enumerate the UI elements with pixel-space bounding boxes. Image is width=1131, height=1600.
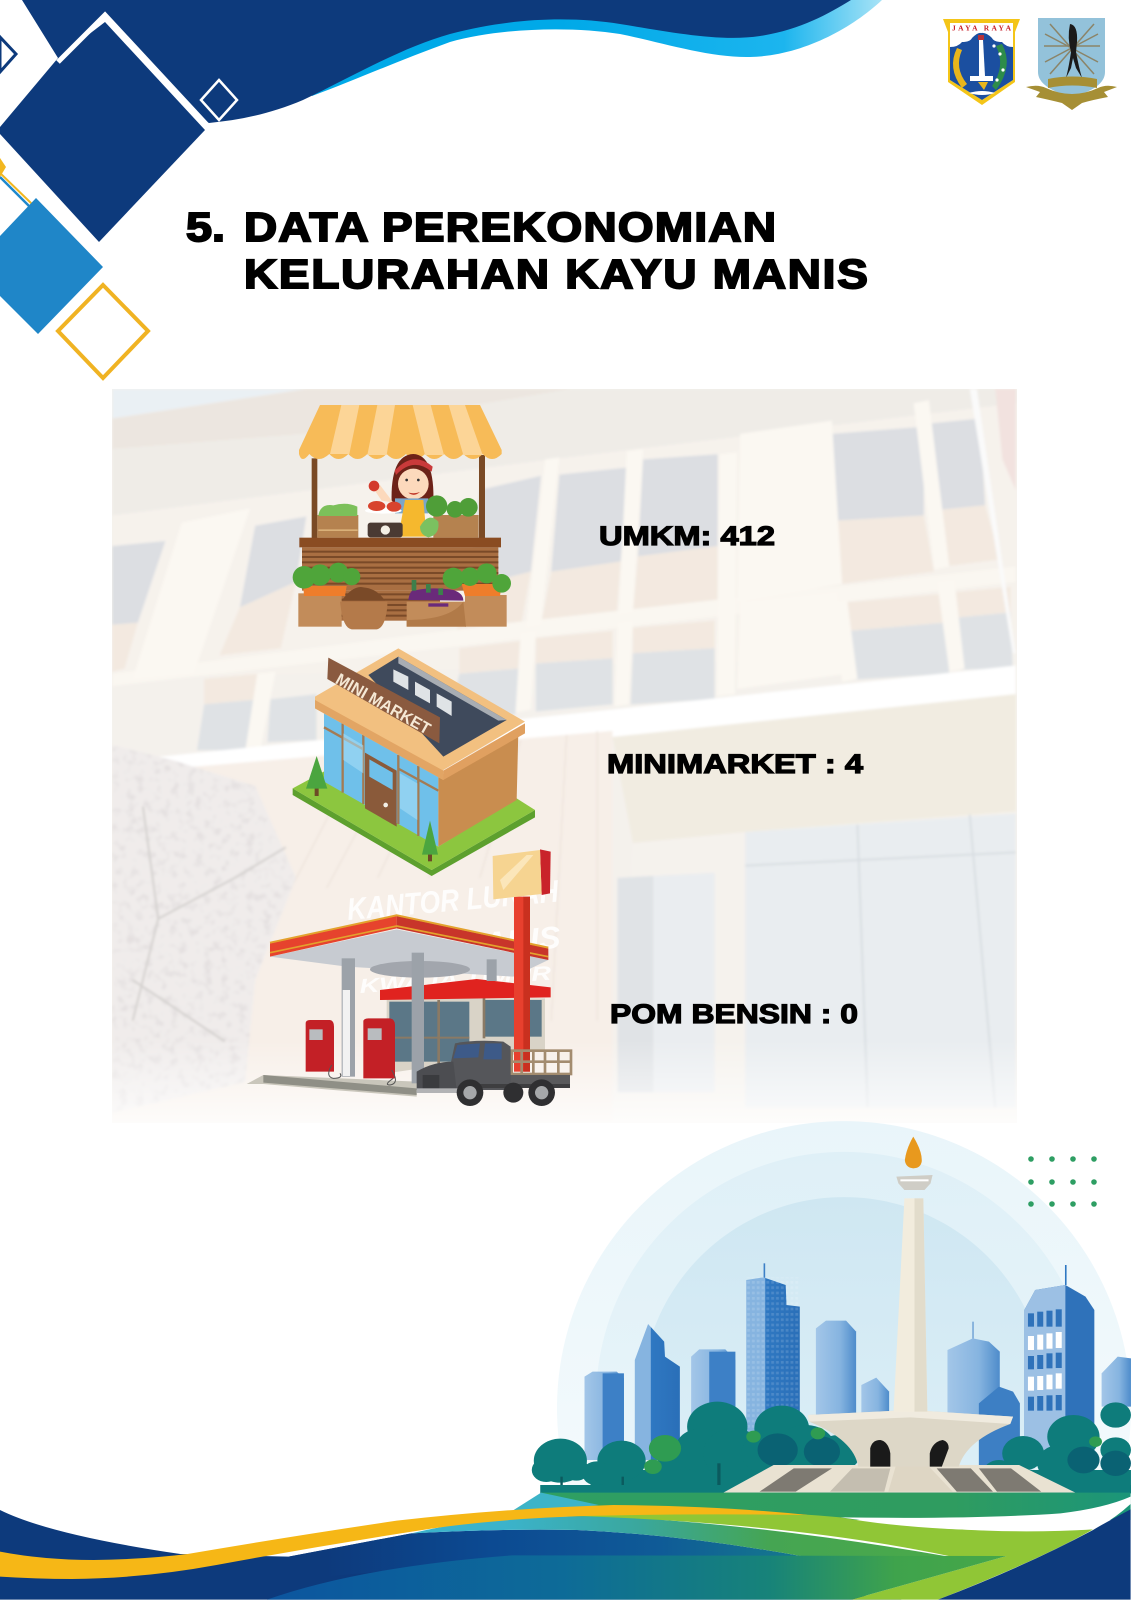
sky circles behind skyline — [557, 1121, 1131, 1500]
flag pole and flag — [997, 390, 1016, 486]
logo: Jaya Raya shield: JAYA RAYA — [952, 24, 1012, 32]
navy right corner — [938, 1509, 1131, 1600]
roof AC units — [393, 669, 452, 716]
data label: pom bensin: POM BENSIN : 0 — [610, 999, 858, 1029]
monument obelisk — [894, 1137, 933, 1412]
pink wall — [197, 730, 613, 770]
beam 1 — [454, 600, 718, 638]
top wave decoration — [22, 0, 882, 123]
facade — [112, 403, 1017, 679]
teal corner — [411, 1493, 599, 1535]
title: KELURAHAN KAYU MANIS — [244, 252, 868, 297]
illustration: market stall — [293, 405, 511, 629]
monument base — [808, 1410, 1013, 1467]
awning — [299, 405, 502, 459]
roof — [315, 648, 525, 780]
logo: Jaya Raya shield — [943, 19, 1020, 105]
logo: Kota Administrasi crest — [1026, 18, 1117, 110]
white wave — [841, 1497, 1131, 1531]
canopy pillars — [342, 953, 497, 1083]
trees — [532, 1402, 1131, 1493]
cherry tree — [112, 745, 296, 1113]
price sign on pole — [493, 849, 551, 1072]
city skyline — [532, 1137, 1131, 1493]
truck — [417, 1041, 571, 1106]
counter — [299, 538, 501, 621]
beam 2 — [153, 666, 1016, 774]
illustration: petrol station and truck — [247, 849, 571, 1106]
lawn — [541, 1493, 1131, 1520]
shop — [380, 979, 551, 1073]
data label: UMKM: UMKM: 412 — [599, 521, 775, 551]
middle green wave — [411, 1516, 949, 1557]
lower pink — [204, 587, 1011, 704]
store sign: MINI MARKET — [332, 670, 434, 738]
pine trees — [306, 756, 438, 861]
pillars — [246, 402, 965, 748]
illustration: minimarket building — [293, 648, 535, 876]
faded building sign: KANTOR LURAH — [346, 874, 560, 927]
top crates — [317, 495, 479, 538]
cream wall — [612, 694, 1016, 843]
upper pink panels — [112, 505, 1000, 672]
forecourt — [247, 1075, 417, 1097]
diamond decorations — [0, 15, 237, 378]
lime wave — [577, 1512, 1093, 1600]
lower windows — [197, 612, 1013, 750]
fuel pumps — [306, 1018, 395, 1085]
base navy — [0, 1510, 902, 1600]
vendor — [365, 454, 433, 537]
sky and roof — [113, 390, 558, 448]
blue wave — [289, 1530, 804, 1577]
monument stairs — [723, 1464, 1075, 1493]
grass base — [293, 770, 535, 876]
low wave — [267, 1555, 1006, 1600]
side wall — [438, 732, 518, 847]
title: DATA PEREKONOMIAN — [244, 205, 776, 250]
stall posts — [312, 455, 485, 538]
gold wave — [0, 1505, 808, 1579]
faded building sign — [348, 880, 560, 993]
produce crates — [293, 563, 511, 629]
bottom waves — [0, 1493, 1131, 1600]
faded building sign: KAYU MANIS — [358, 919, 562, 972]
canopy — [270, 915, 548, 978]
title — [186, 204, 868, 297]
title: 5. — [186, 204, 225, 250]
ground floor — [612, 812, 1016, 1123]
scale — [368, 523, 403, 537]
panel: faded building photo background — [112, 389, 1017, 1123]
decorative green dots — [1028, 1156, 1097, 1207]
data label: minimarket: MINIMARKET : 4 — [607, 749, 863, 779]
skyscrapers — [585, 1263, 1131, 1470]
storefront — [324, 713, 438, 847]
upper windows — [112, 419, 985, 625]
faded building sign: KWAJA TIMUR — [359, 963, 553, 998]
